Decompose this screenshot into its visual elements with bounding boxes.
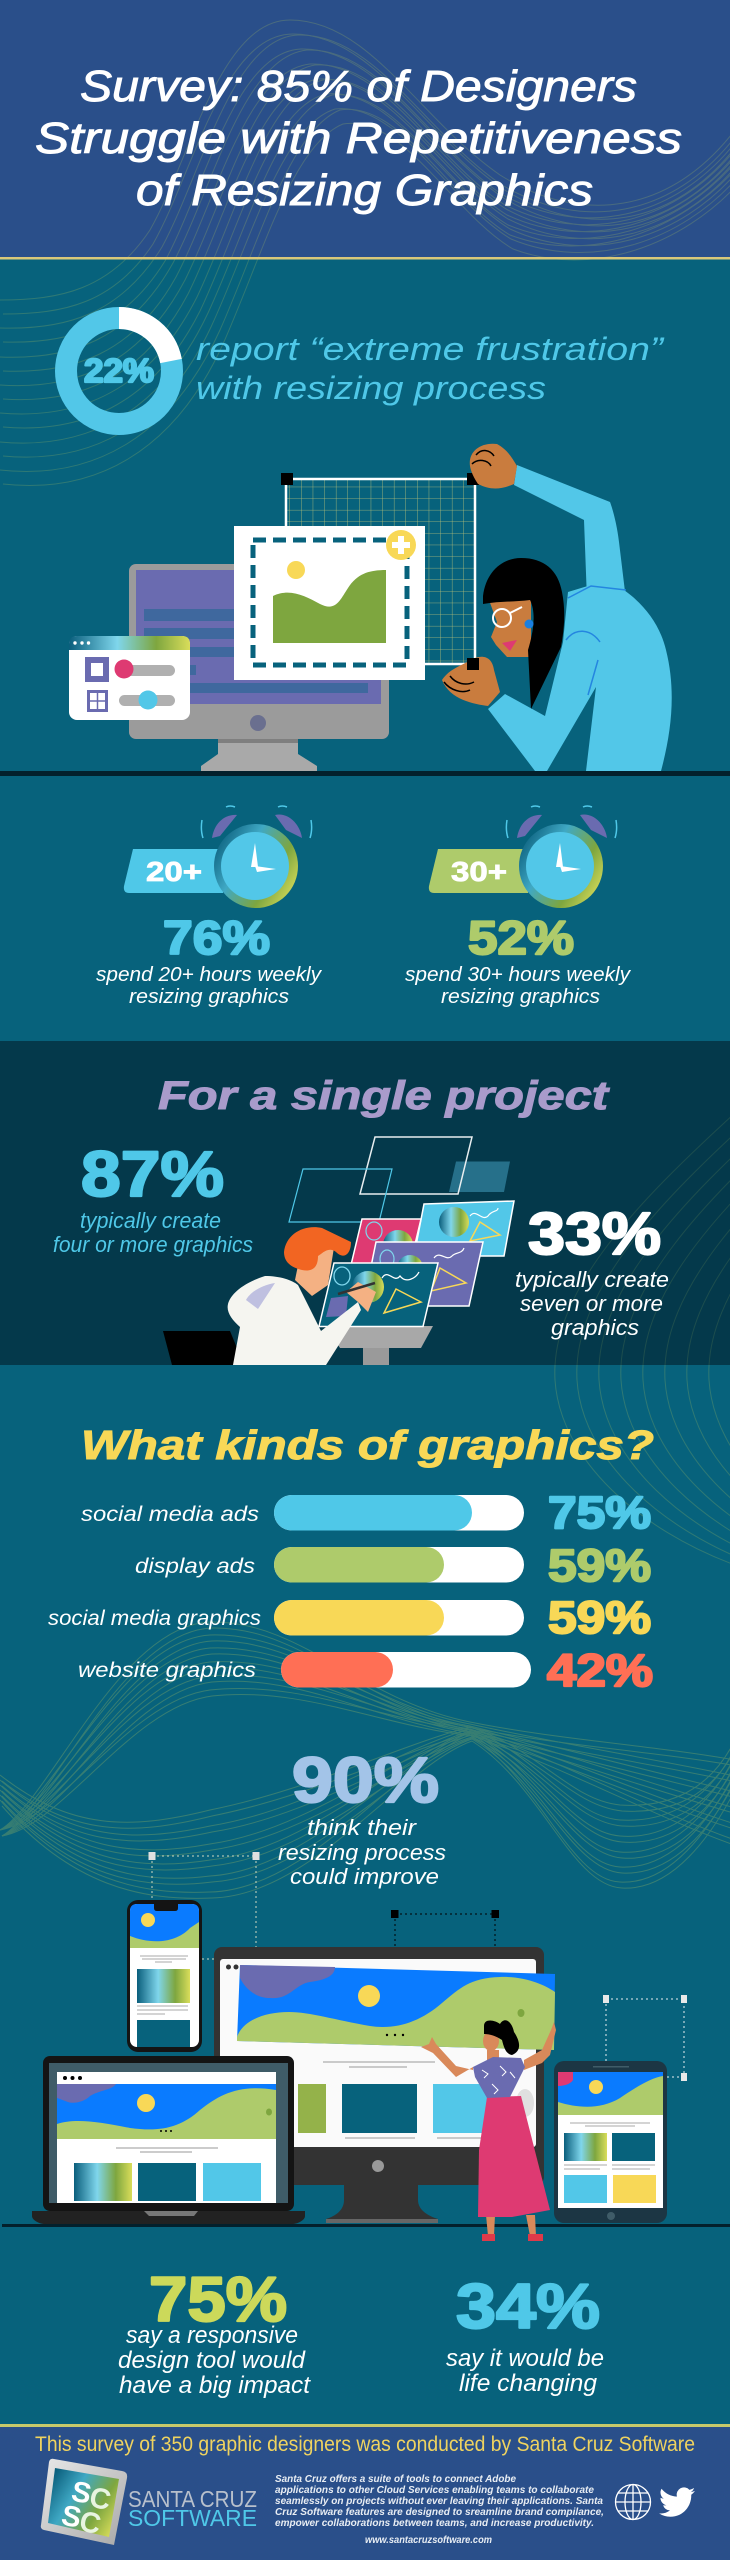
text: company description: Cruz Software features are designed to sreamline brand compilance, [275,2506,604,2518]
text: company description: empower collaborations between teams, and increase productivity. [275,2517,594,2529]
resize guides [148,1852,687,2081]
text: company description [275,2473,604,2529]
heading: what kinds of graphics: What kinds of graphics? [81,1422,654,1468]
tablet [554,2061,667,2223]
text: 75% caption: design tool would [118,2347,306,2374]
bar: social media ads: social media ads [81,1503,260,1526]
stat: 87% [53,1138,253,1257]
woman holding banner [421,2020,556,2241]
icon: alarm clock 20+ [124,806,312,908]
logo: Santa Cruz Software [41,2459,257,2545]
icon: globe [616,2484,650,2520]
chair [163,1331,244,1365]
text: 30+ caption [405,964,631,1008]
woman [442,444,672,771]
illustration: responsive devices [2,1852,730,2241]
text: website url: www.santacruzsoftware.com [365,2535,492,2546]
text: 33% caption: graphics [551,1315,639,1340]
phone [127,1900,202,2052]
stat: 34%: 34% [456,2272,600,2342]
title: Survey: 85% of Designers [80,62,637,111]
clock stat: 30+ hours [405,806,631,1008]
stat: 87%: 87% [81,1138,224,1210]
chart: 22% donut: 22% [84,352,154,389]
panel: single project background [0,1041,730,1365]
logo: Santa Cruz Software: S [59,2500,84,2535]
bar: social media graphics [48,1592,651,1643]
text: 90% caption: resizing process [278,1840,446,1865]
bar: display ads [135,1540,651,1591]
icon: alarm clock 30+ [429,806,617,908]
text: extreme frustration [196,331,665,406]
bar: display ads: display ads [135,1555,256,1578]
text: extreme frustration: with resizing process [196,370,546,406]
text: 30+ caption: spend 30+ hours weekly [405,964,631,986]
stat: 34% [446,2272,604,2397]
text: 20+ caption: resizing graphics [129,986,289,1008]
monitor [129,564,389,771]
text: 30+ caption: resizing graphics [441,986,600,1008]
clock stat: 20+ hours [96,806,322,1008]
bar: social media graphics: social media graphics [48,1607,262,1630]
settings panel [69,636,190,720]
bar: website graphics: 42% [547,1645,653,1696]
text: 34% caption: life changing [459,2370,598,2397]
title [35,62,682,215]
cyan card [414,1201,514,1256]
banner graphic [237,1965,555,2050]
text: 20+ caption: spend 20+ hours weekly [96,964,322,986]
icon: alarm clock 20+: 20+ [146,856,202,887]
panel: footer background [0,2427,730,2560]
desktop monitor [214,1947,544,2223]
text: 87% caption: typically create [80,1208,221,1233]
bar: display ads: 59% [548,1540,651,1591]
text: 75% caption: say a responsive [126,2322,298,2349]
image card [234,526,425,680]
logo: Santa Cruz Software: C [87,2482,114,2517]
illustration: designer at tablet with layered graphics [163,1137,514,1365]
clock stat: 30+ hours: 52% [468,911,574,964]
bar chart: kinds of graphics [48,1487,653,1696]
text: 75% caption: have a big impact [119,2372,311,2399]
illustration: designer resizing graphic [69,444,672,771]
title: Struggle with Repetitiveness [35,114,682,163]
text: 87% caption: four or more graphics [53,1232,253,1257]
text: 33% caption [515,1267,669,1340]
icon: alarm clock 30+: 30+ [451,856,507,887]
logo: Santa Cruz Software: SANTA CRUZ [128,2486,257,2512]
text: 34% caption: say it would be [446,2345,604,2372]
stat: 33% [515,1201,669,1340]
stat: 90%: 90% [292,1744,439,1816]
clock stat: 20+ hours: 76% [163,911,270,964]
stat: 33%: 33% [528,1201,661,1267]
floor line [2,2224,730,2227]
text: 90% caption: think their [307,1815,418,1840]
stat: 90% [278,1744,446,1889]
resize grid [281,473,479,670]
purple card [363,1242,483,1306]
stat: 75%: 75% [149,2265,287,2335]
text: 87% caption [53,1208,253,1257]
text: 34% caption [446,2345,604,2397]
man [228,1227,376,1365]
logo: Santa Cruz Software: C [77,2506,104,2541]
bar: website graphics: website graphics [78,1659,257,1682]
heading: for a single project: For a single project [158,1074,610,1118]
chart: 22% donut [66,318,172,424]
bar: social media ads [81,1487,651,1538]
text: 75% caption [118,2322,311,2399]
laptop [32,2056,305,2224]
logo: Santa Cruz Software: SOFTWARE [128,2505,257,2531]
text: 20+ caption [96,964,322,1008]
logo: Santa Cruz Software: S [69,2476,94,2511]
bar: social media ads: 75% [548,1487,651,1538]
text: 90% caption: could improve [290,1864,439,1889]
title: of Resizing Graphics [136,166,593,215]
tablet stand [326,1326,433,1365]
stat: 75% [118,2265,311,2399]
bar: social media graphics: 59% [548,1592,651,1643]
text: company description: seamlessly on projects without ever leaving their applications. Santa [275,2495,603,2507]
text: 33% caption: typically create [515,1267,669,1292]
bar: website graphics [78,1645,653,1696]
panel: header background [0,0,730,257]
text: company description: applications to other Cloud Services enabling teams to collaborate [275,2484,594,2496]
icon: twitter bird [659,2487,695,2517]
text: 33% caption: seven or more [520,1291,663,1316]
text: company description: Santa Cruz offers a suite of tools to connect Adobe [275,2473,516,2485]
pink card [351,1219,421,1265]
text: 90% caption [278,1815,446,1889]
text: extreme frustration: report “extreme frustration” [196,331,665,367]
front card [319,1263,438,1326]
